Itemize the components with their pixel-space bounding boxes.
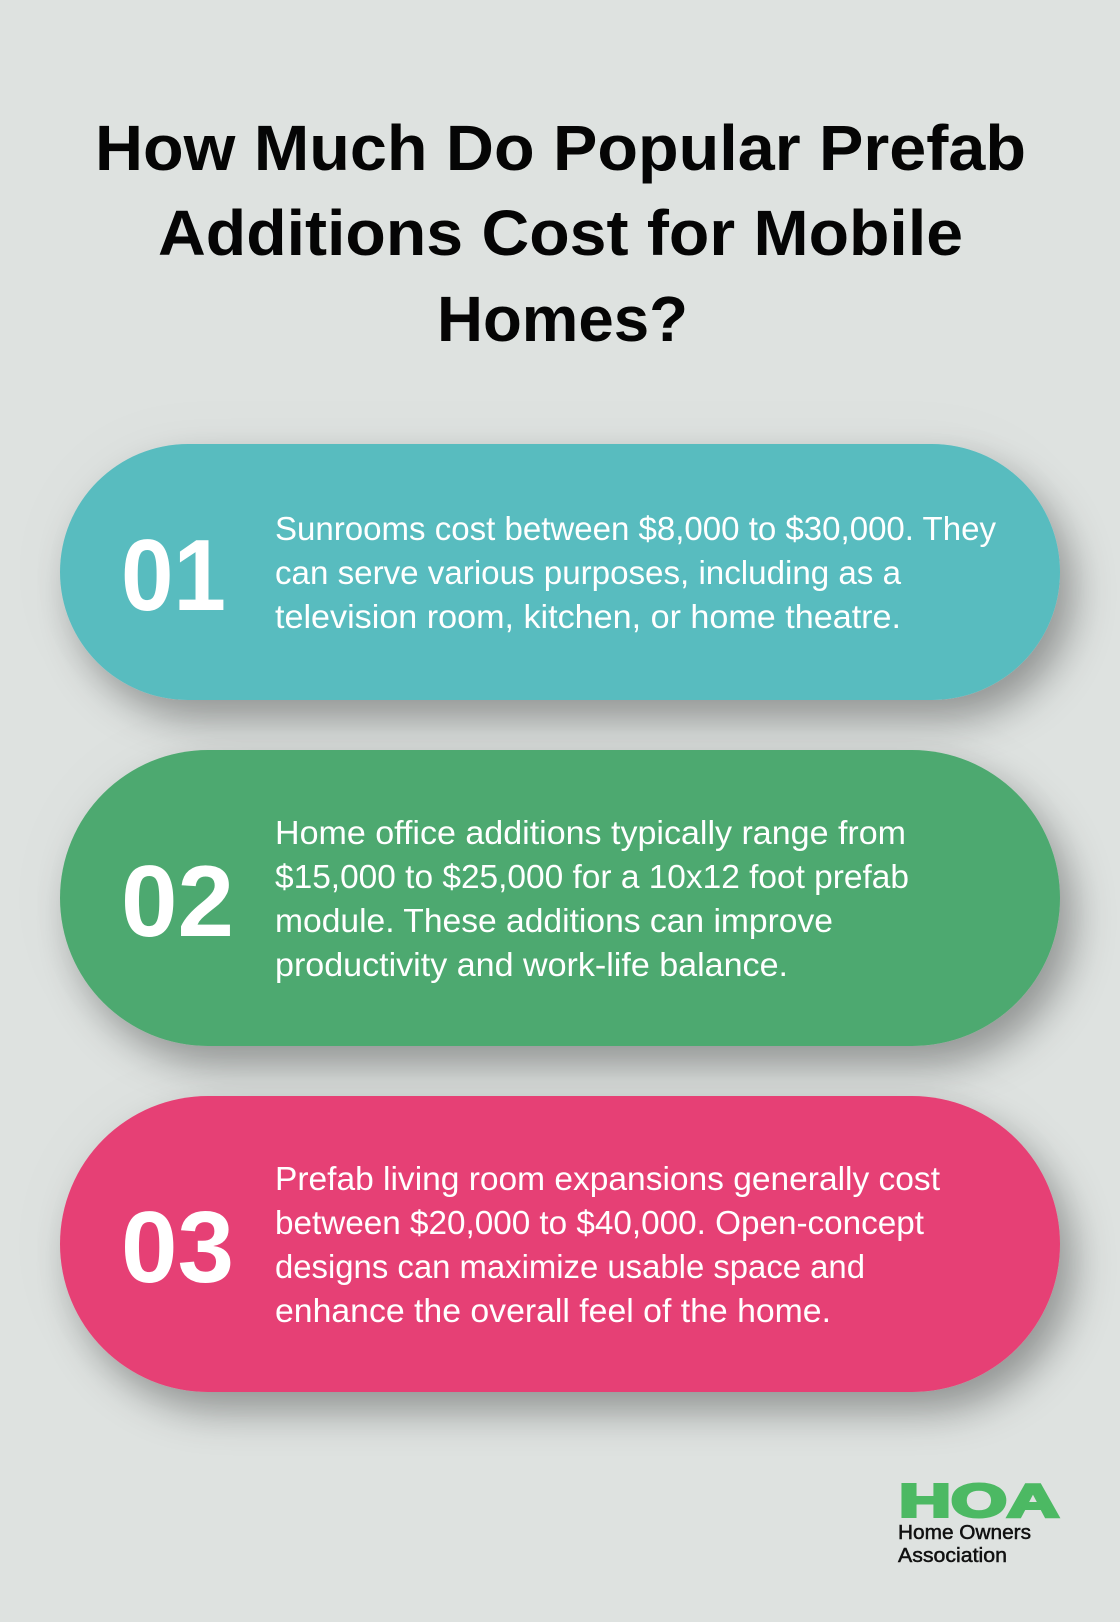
panel: living room [60,1096,1060,1392]
number 02: 02 [121,846,234,958]
title: Additions Cost for Mobile [158,197,963,269]
number 01: 01 [121,520,226,632]
logo wordmark [898,1522,1031,1567]
description: enhance the overall feel of the home. [275,1292,831,1329]
logo mark: HOA [899,1474,1059,1526]
description: can serve various purposes, including as a [275,554,902,591]
pink pill [60,1096,1060,1392]
number 03: 03 [121,1192,234,1304]
description [275,1160,940,1329]
green pill [60,750,1060,1046]
panel: home office [60,750,1060,1046]
description: Home office additions typically range from [275,814,906,851]
description: television room, kitchen, or home theatre. [275,598,901,635]
description: module. These additions can improve [275,902,833,939]
description: Prefab living room expansions generally cost [275,1160,940,1197]
title: Homes? [437,283,688,355]
logo wordmark: Association [898,1545,1007,1567]
logo wordmark: Home Owners [898,1522,1031,1544]
description: designs can maximize usable space and [275,1248,865,1285]
description: between $20,000 to $40,000. Open-concept [275,1204,924,1241]
title [95,112,1026,355]
teal pill [60,444,1060,700]
description: productivity and work-life balance. [275,946,788,983]
panel: sunrooms [60,444,1060,700]
description: Sunrooms cost between $8,000 to $30,000. They [275,510,996,547]
description [275,510,996,635]
description: $15,000 to $25,000 for a 10x12 foot prefab [275,858,909,895]
title: How Much Do Popular Prefab [95,112,1026,184]
logo: HOA Home Owners Association [898,1474,1059,1567]
description [275,814,909,983]
